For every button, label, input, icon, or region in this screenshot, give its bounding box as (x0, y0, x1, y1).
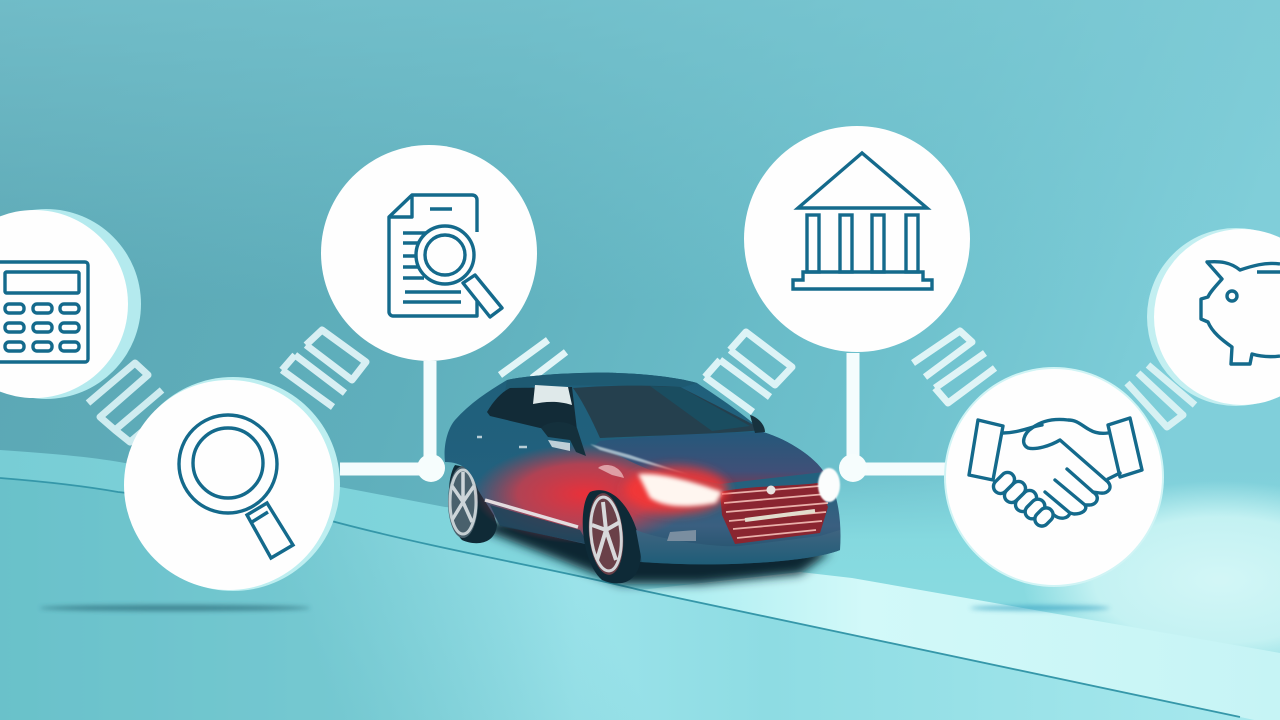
left headlight (638, 474, 722, 506)
windshield (573, 386, 763, 438)
front wheel (583, 490, 641, 583)
circle: handshake (944, 367, 1164, 587)
icon: piggy bank (1201, 262, 1280, 364)
wing mirror right (750, 415, 765, 433)
wheel arch highlight (598, 465, 624, 478)
ground shadows (40, 605, 1110, 611)
door handles (477, 437, 527, 447)
circle: document (321, 145, 537, 361)
side windows (487, 387, 577, 430)
window reflection (533, 385, 572, 405)
connector node left (417, 454, 445, 482)
circle: calculator (0, 209, 141, 399)
bumper (636, 530, 840, 564)
front grille (720, 483, 828, 544)
hood highlight (590, 444, 690, 475)
car (445, 373, 840, 584)
fog lamp (667, 530, 696, 541)
hood (595, 432, 824, 484)
spring connector: bank to handshake (913, 331, 995, 403)
door mirror (541, 422, 586, 456)
spring connector: document to car (500, 340, 566, 378)
side trim (485, 500, 578, 527)
headlight glow (624, 466, 728, 514)
icon: document with magnifier (389, 195, 502, 317)
connector: magnifier to document (340, 361, 430, 469)
car shadow (470, 510, 830, 584)
roof (505, 373, 697, 392)
spring connector: handshake to piggy bank (1127, 365, 1195, 427)
circle: bank (744, 126, 970, 352)
connector node right (839, 454, 867, 482)
rear wheel (448, 465, 497, 543)
icon: magnifying glass (179, 415, 293, 558)
spring connector: car to bank (705, 332, 792, 412)
icon: calculator (0, 262, 88, 362)
car body (445, 373, 840, 564)
icon: bank building (793, 153, 932, 289)
red glow (473, 444, 697, 544)
floor and road (0, 450, 1280, 720)
right headlight (818, 468, 840, 502)
circle: magnifier (124, 377, 340, 591)
spring connector: magnifier to document (282, 330, 366, 407)
circle: piggy bank (1147, 228, 1280, 406)
icon: handshake (969, 418, 1142, 529)
spring connector: calculator to magnifier (88, 363, 162, 442)
connector: handshake to bank (853, 353, 945, 469)
lower door shade (490, 505, 588, 544)
